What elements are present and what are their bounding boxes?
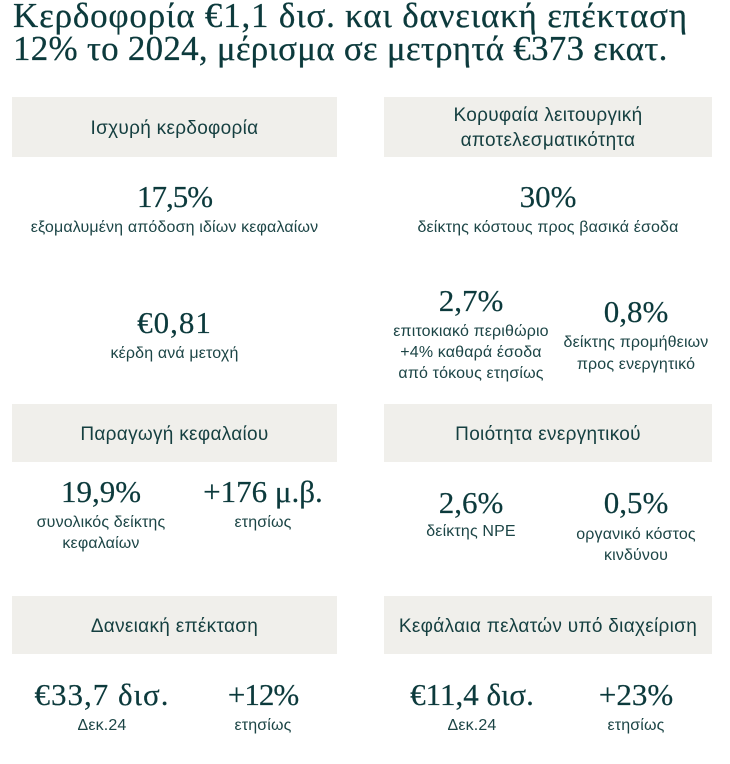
metric: loans growth (228, 677, 298, 734)
metric: NPE ratio: δείκτης NPE (426, 523, 516, 540)
metric: basis points yearly: ετησίως (234, 514, 292, 531)
metric: net interest margin: από τόκους ετησίως (398, 365, 544, 382)
metric: loans amount: €33,7 δισ. (35, 677, 169, 712)
metric: client funds growth: ετησίως (607, 717, 665, 734)
metric: client funds amount: Δεκ.24 (448, 717, 496, 734)
panel header: capital generation (12, 404, 337, 462)
metric: total capital ratio: 19,9% (61, 474, 141, 509)
metric: fee ratio: 0,8% (604, 294, 668, 329)
panel header: strong profitability: Ισχυρή κερδοφορία (91, 118, 258, 138)
title (13, 0, 688, 68)
metric: NPE ratio (426, 485, 516, 540)
panel header: asset quality: Ποιότητα ενεργητικού (455, 424, 641, 444)
metric: loans growth: +12% (228, 677, 298, 712)
metric: earnings per share (110, 305, 239, 362)
metric: fee ratio (564, 294, 708, 373)
panel header: strong profitability (12, 97, 337, 157)
panel header: capital generation: Παραγωγή κεφαλαίου (80, 424, 269, 444)
metric: basis points yearly: +176 μ.β. (203, 474, 323, 509)
metric: organic cost of risk (576, 485, 696, 564)
panel header: client funds under management (384, 596, 712, 654)
metric: organic cost of risk: κινδύνου (604, 547, 668, 564)
panel header: loan expansion: Δανειακή επέκταση (91, 616, 258, 636)
metric: total capital ratio: συνολικός δείκτης (37, 514, 165, 531)
title: 12% το 2024, μέρισμα σε μετρητά €373 εκατ. (13, 29, 668, 68)
metric: net interest margin (393, 283, 549, 382)
metric: fee ratio: δείκτης προμήθειων (564, 334, 708, 351)
metric: organic cost of risk: 0,5% (604, 485, 668, 520)
metric: organic cost of risk: οργανικό κόστος (576, 526, 696, 543)
metric: return on equity: 17,5% (137, 179, 212, 214)
metric: client funds amount: €11,4 δισ. (410, 677, 534, 712)
metric: cost to core income: 30% (520, 179, 576, 214)
metric: earnings per share: €0,81 (137, 305, 212, 340)
metric: fee ratio: προς ενεργητικό (577, 356, 695, 373)
panel header: client funds under management: Κεφάλαια πελατών υπό διαχείριση (399, 616, 697, 636)
metric: cost to core income: δείκτης κόστους προς βασικά έσοδα (417, 219, 679, 236)
metric: net interest margin: επιτοκιακό περιθώριο (393, 323, 549, 340)
metric: net interest margin: 2,7% (439, 283, 503, 318)
metric: loans amount: Δεκ.24 (78, 717, 126, 734)
metric: client funds growth: +23% (599, 677, 673, 712)
panel header: asset quality (384, 404, 712, 462)
panel header: operating efficiency: αποτελεσματικότητα (461, 130, 635, 151)
metric: basis points yearly (203, 474, 323, 531)
panel header: loan expansion (12, 596, 337, 654)
metric: cost to core income (417, 179, 679, 236)
metric: total capital ratio: κεφαλαίων (62, 535, 140, 552)
metric: net interest margin: +4% καθαρά έσοδα (400, 344, 542, 361)
metric: loans amount (34, 677, 169, 734)
metric: earnings per share: κέρδη ανά μετοχή (110, 345, 239, 362)
metric: return on equity: εξομαλυμένη απόδοση ιδίων κεφαλαίων (31, 219, 318, 236)
metric: NPE ratio: 2,6% (439, 485, 503, 520)
metric: loans growth: ετησίως (234, 717, 292, 734)
panel header: operating efficiency: Κορυφαία λειτουργική (454, 105, 642, 126)
metric: client funds amount (410, 677, 534, 734)
metric: total capital ratio (37, 474, 165, 552)
metric: client funds growth (599, 677, 673, 734)
panel header: operating efficiency (384, 97, 712, 157)
metric: return on equity (31, 179, 318, 236)
